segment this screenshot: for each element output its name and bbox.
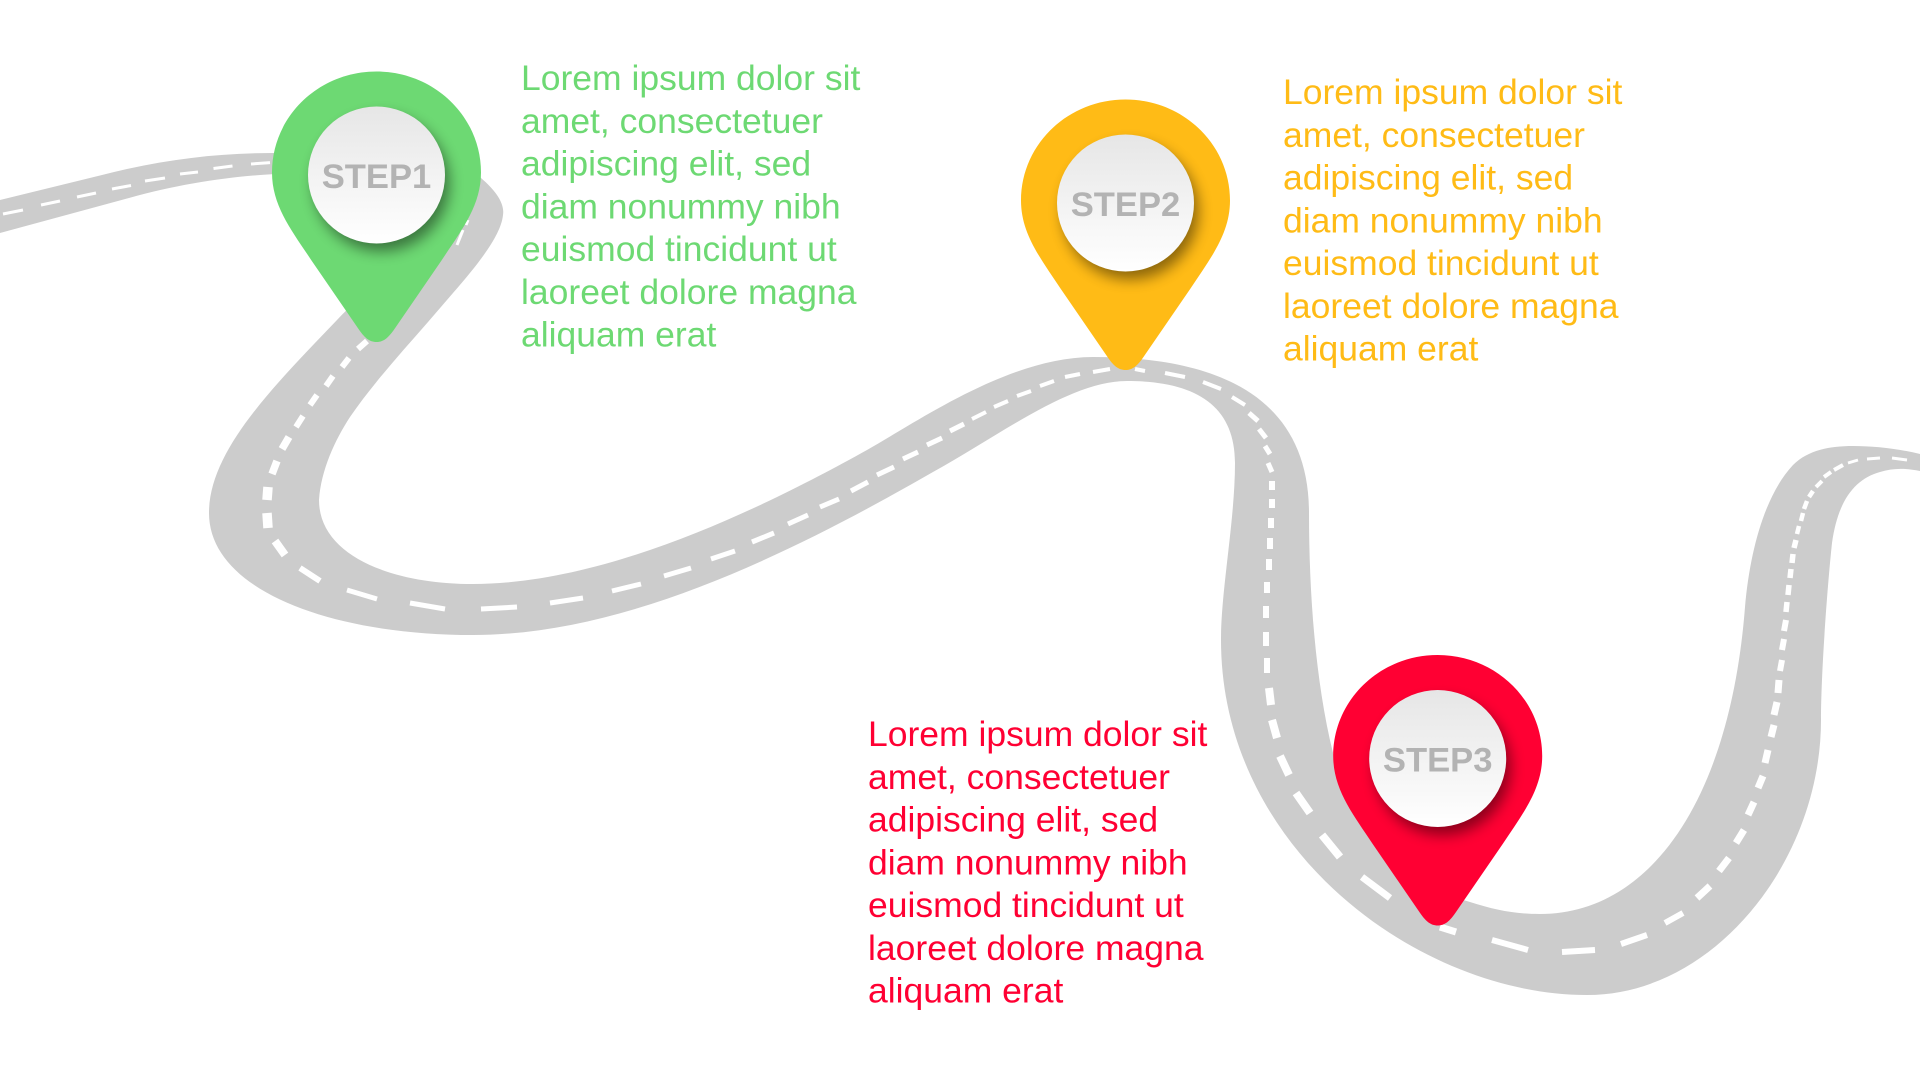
pin: step 2 xyxy=(1021,100,1230,370)
disc xyxy=(1057,134,1194,272)
text block: step 3: Lorem ipsum dolor sit xyxy=(868,714,1207,754)
disc shadow xyxy=(1062,144,1198,280)
label step1: STEP1 xyxy=(322,158,431,196)
pin: step 3 xyxy=(1333,655,1542,926)
text block: step 3: euismod tincidunt ut xyxy=(868,885,1184,925)
pin body orange xyxy=(1021,100,1230,370)
disc shadow xyxy=(1375,699,1511,835)
text block: step 2: euismod tincidunt ut xyxy=(1283,243,1599,283)
pin body green xyxy=(272,72,481,342)
text block: step 2: diam nonummy nibh xyxy=(1283,200,1603,240)
pin body red xyxy=(1333,655,1542,926)
text block: step 1: amet, consectetuer xyxy=(521,101,823,141)
text block: step 3: adipiscing elit, sed xyxy=(868,800,1158,840)
text block: step 3: amet, consectetuer xyxy=(868,757,1170,797)
text block: step 1: Lorem ipsum dolor sit xyxy=(521,58,860,98)
text block: step 2: amet, consectetuer xyxy=(1283,115,1585,155)
text block: step 3: laoreet dolore magna xyxy=(868,928,1204,968)
text block: step 2: adipiscing elit, sed xyxy=(1283,158,1573,198)
text block: step 1: euismod tincidunt ut xyxy=(521,229,837,269)
road surface xyxy=(0,152,1920,995)
disc xyxy=(308,106,445,244)
text block: step 1: aliquam erat xyxy=(521,314,716,354)
label step2: STEP2 xyxy=(1071,186,1180,224)
text block: step 2: Lorem ipsum dolor sit xyxy=(1283,72,1622,112)
text block: step 2: laoreet dolore magna xyxy=(1283,286,1619,326)
text block: step 1: diam nonummy nibh xyxy=(521,186,841,226)
text block: step 3: aliquam erat xyxy=(868,970,1063,1010)
text block: step 1: laoreet dolore magna xyxy=(521,272,857,312)
text block: step 2: aliquam erat xyxy=(1283,328,1478,368)
disc xyxy=(1369,690,1506,827)
text block: step 3: diam nonummy nibh xyxy=(868,842,1188,882)
lane dashes xyxy=(3,163,1907,952)
text block: step 1: adipiscing elit, sed xyxy=(521,144,811,184)
pin: step 1 xyxy=(272,72,481,342)
label step3: STEP3 xyxy=(1383,742,1492,780)
road xyxy=(0,152,1920,995)
disc shadow xyxy=(314,116,450,252)
